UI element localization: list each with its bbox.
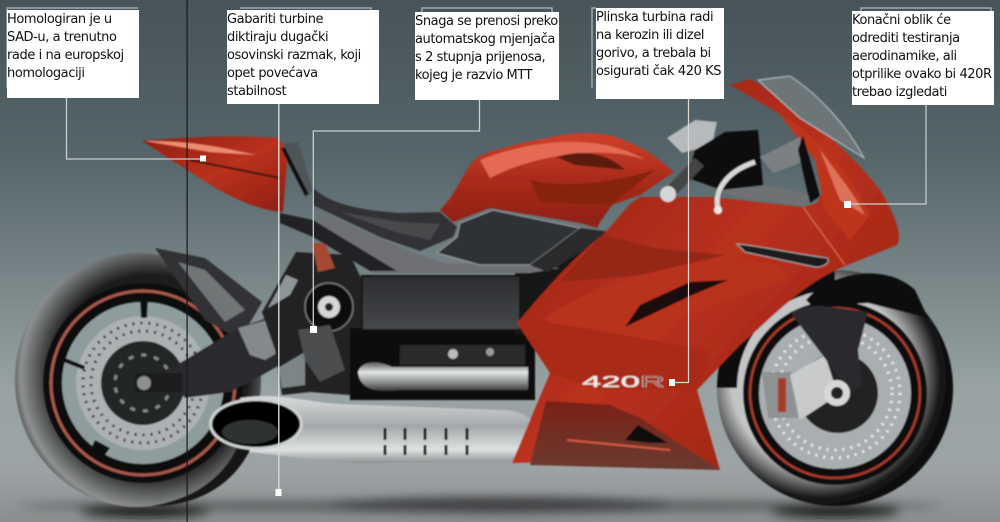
text box: homologation: rade i na europskoj <box>7 48 124 63</box>
text box: wheelbase: Gabariti turbine <box>227 12 323 27</box>
text box: gas turbine <box>596 8 724 99</box>
rear wheel <box>15 253 261 507</box>
frame strip below tank <box>530 228 612 272</box>
model badge 420R: 420 R <box>582 374 665 391</box>
text box: aerodynamics: odrediti testiranja <box>852 31 960 46</box>
carbon tank panel <box>437 210 580 265</box>
leader: gas turbine <box>669 99 688 386</box>
text box: transmission <box>415 12 559 100</box>
front wheel <box>717 270 953 506</box>
text box: wheelbase <box>227 10 379 104</box>
front fender <box>806 273 928 318</box>
under-seat grey panel <box>313 210 560 273</box>
leader: transmission <box>310 100 480 333</box>
fuel tank <box>440 133 674 228</box>
swingarm <box>135 307 315 398</box>
text box: transmission: s 2 stupnja prijenosa, <box>415 50 545 65</box>
motorcycle <box>15 76 953 507</box>
separator black vertical line <box>186 0 188 522</box>
text box: gas turbine: gorivo, a trebala bi <box>596 46 711 61</box>
text box: wheelbase: stabilnost <box>227 84 286 99</box>
text box: wheelbase: osovinski razmak, koji <box>227 48 361 63</box>
handlebar and lever <box>660 120 763 214</box>
text box: aerodynamics: aerodinamike, ali <box>852 49 957 64</box>
black side box <box>362 276 520 330</box>
windscreen <box>758 76 864 158</box>
text box: aerodynamics: trebao izgledati <box>852 85 947 100</box>
leader: homologation <box>66 98 206 162</box>
text box: gas turbine: osigurati čak 420 KS <box>596 64 721 79</box>
text box: homologation: homologaciji <box>7 66 85 81</box>
main fairing <box>512 79 899 470</box>
hugger highlight <box>178 262 245 322</box>
ground shadow <box>15 497 945 517</box>
text box: transmission: kojeg je razvio MTT <box>415 68 532 83</box>
text box: gas turbine: na kerozin ili dizel <box>596 28 704 43</box>
engine: turbine pipe <box>350 328 535 400</box>
text box: homologation <box>7 10 139 98</box>
dark gap beside box <box>515 232 612 335</box>
text box: aerodynamics <box>852 11 994 105</box>
carbon tail brace <box>280 213 397 271</box>
rear tail fairing <box>142 137 313 212</box>
text box: homologation: SAD-u, a trenutno <box>7 30 116 45</box>
leader: wheelbase <box>276 104 282 496</box>
text box: transmission: automatskog mjenjača <box>415 32 555 47</box>
text box: aerodynamics: Konačni oblik će <box>852 13 951 28</box>
seat highlight <box>340 212 440 240</box>
text box: homologation: Homologiran je u <box>7 12 112 27</box>
cockpit interior <box>720 135 820 205</box>
leader: aerodynamics <box>844 105 926 208</box>
seat <box>313 188 457 251</box>
exhaust <box>209 396 536 463</box>
callout frames peeking above boxes <box>7 8 991 88</box>
text box: wheelbase: diktiraju dugački <box>227 30 328 45</box>
text box: transmission: Snaga se prenosi preko <box>415 14 558 29</box>
text box: gas turbine: Plinska turbina radi <box>596 10 713 25</box>
rear hugger <box>155 248 262 340</box>
text box: aerodynamics: otprilike ovako bi 420R <box>852 67 992 82</box>
frame and sprocket <box>262 243 362 395</box>
text box: wheelbase: opet povećava <box>227 66 318 81</box>
